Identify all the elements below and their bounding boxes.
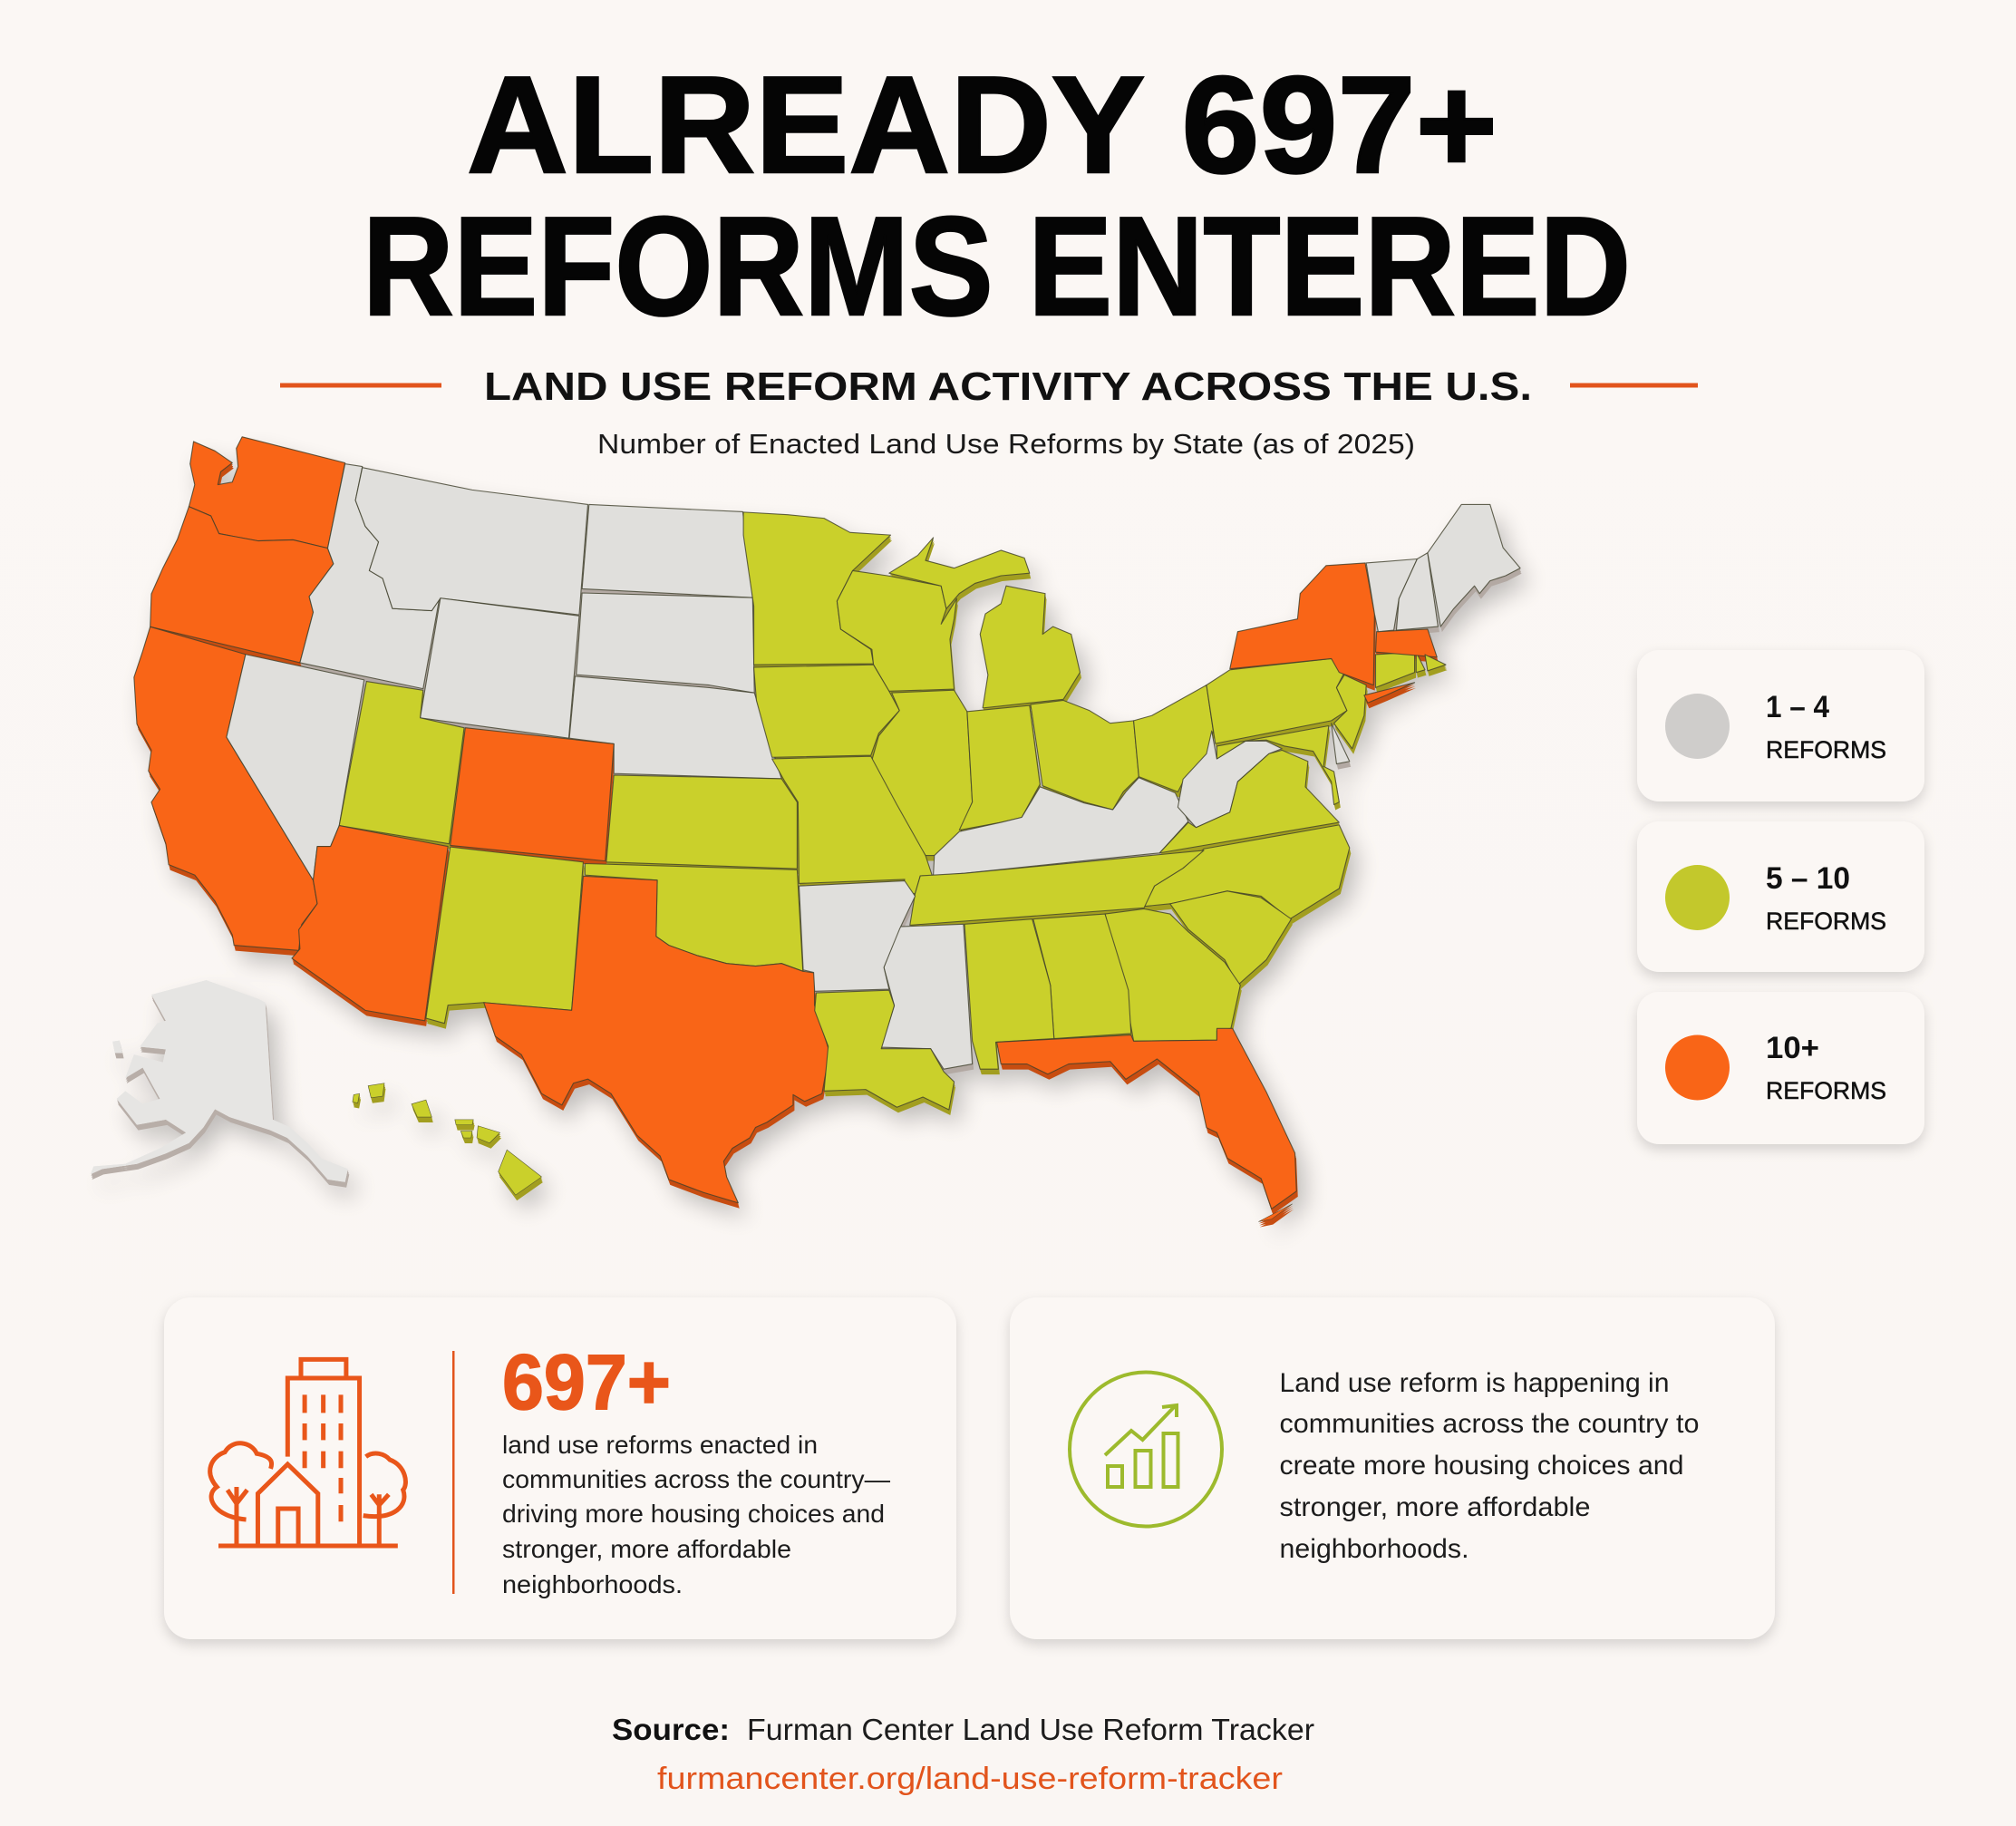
state: North Carolina bbox=[1144, 825, 1350, 919]
state: Kentucky bbox=[934, 778, 1188, 876]
legend card: 1-4 reforms: 1 – 4 bbox=[1766, 690, 1829, 724]
stat description: communities across the country— bbox=[502, 1465, 891, 1493]
legend card: 1-4 reforms bbox=[1637, 650, 1924, 801]
state: Maryland bbox=[1216, 725, 1339, 804]
state: Rhode Island bbox=[1416, 652, 1425, 673]
statement text: stronger, more affordable bbox=[1280, 1492, 1590, 1522]
stat description: land use reforms enacted in bbox=[502, 1431, 818, 1459]
source bbox=[612, 1713, 1314, 1796]
source: Source: bbox=[612, 1713, 730, 1746]
state: Montana bbox=[355, 468, 588, 615]
state: Missouri bbox=[772, 756, 932, 894]
state: New York bbox=[1230, 563, 1374, 685]
state: Florida Keys bbox=[1258, 1204, 1293, 1221]
map caption: Number of Enacted Land Use Reforms by State (as of 2025) bbox=[597, 428, 1415, 460]
state: Massachusetts bbox=[1376, 629, 1437, 657]
state: Illinois bbox=[871, 690, 973, 856]
legend card: 5-10 reforms bbox=[1637, 821, 1924, 972]
state: Alabama bbox=[1033, 914, 1131, 1039]
title bbox=[363, 48, 1631, 345]
legend card: 10+ reforms: REFORMS bbox=[1766, 1077, 1886, 1104]
statement text: Land use reform is happening in bbox=[1280, 1368, 1670, 1398]
state: Kansas bbox=[606, 775, 797, 869]
state: Virginia bbox=[1159, 750, 1339, 853]
state: Florida bbox=[997, 1028, 1296, 1209]
state: Texas bbox=[484, 876, 829, 1203]
panel: 697+ reforms bbox=[164, 1297, 956, 1639]
state: Wyoming bbox=[421, 598, 579, 738]
state: Oregon bbox=[150, 507, 334, 663]
state: Iowa bbox=[754, 665, 899, 757]
state: Alaska bbox=[91, 980, 348, 1182]
state: Maine bbox=[1428, 504, 1520, 626]
state: Nevada bbox=[227, 655, 364, 880]
legend card: 10+ reforms bbox=[1637, 992, 1924, 1144]
state: Louisiana bbox=[815, 990, 955, 1110]
state: Colorado bbox=[451, 728, 614, 861]
western states bbox=[91, 437, 829, 1203]
state: Long Island bbox=[1364, 683, 1415, 703]
state: Wisconsin bbox=[837, 570, 956, 691]
state: Cape Cod bbox=[1425, 655, 1446, 671]
state: Indiana bbox=[959, 705, 1040, 830]
state: Michigan upper peninsula bbox=[889, 538, 1030, 608]
title: ALREADY 697+ bbox=[467, 48, 1497, 202]
stat description: neighborhoods. bbox=[502, 1570, 683, 1598]
subheading with rules: LAND USE REFORM ACTIVITY ACROSS THE U.S. bbox=[484, 364, 1532, 409]
legend card: 1-4 reforms: REFORMS bbox=[1766, 736, 1886, 763]
source: Furman Center Land Use Reform Tracker bbox=[747, 1713, 1314, 1746]
state: Utah bbox=[339, 682, 464, 844]
state: Michigan lower peninsula bbox=[980, 586, 1080, 708]
stat description: driving more housing choices and bbox=[502, 1500, 885, 1528]
state: West Virginia bbox=[1178, 731, 1282, 828]
state: North Dakota bbox=[582, 504, 752, 597]
state: eastern Ohio region bbox=[1134, 685, 1213, 792]
subheading with rules bbox=[280, 364, 1698, 409]
map: US states by number of enacted reforms bbox=[91, 437, 1520, 1221]
stat description bbox=[502, 1431, 891, 1598]
state: Alabama west section bbox=[964, 919, 1054, 1069]
state: New Hampshire bbox=[1396, 553, 1438, 630]
icon: rising bar chart in circle bbox=[1070, 1373, 1222, 1527]
state: Idaho bbox=[300, 464, 440, 689]
state: Hawaii bbox=[353, 1083, 541, 1195]
state: Connecticut bbox=[1376, 652, 1415, 687]
state: California bbox=[134, 626, 317, 950]
state: Vermont bbox=[1366, 558, 1417, 632]
legend card: 5-10 reforms: 5 – 10 bbox=[1766, 861, 1850, 896]
state: Arkansas bbox=[800, 881, 916, 991]
state: Ohio bbox=[1031, 700, 1139, 810]
state: South Dakota bbox=[577, 593, 754, 693]
source: furmancenter.org/land-use-reform-tracker bbox=[657, 1762, 1283, 1796]
icon: buildings, house and trees bbox=[210, 1359, 405, 1546]
state: Mississippi bbox=[881, 924, 973, 1069]
stat description: stronger, more affordable bbox=[502, 1535, 791, 1563]
legend card: 10+ reforms: 10+ bbox=[1766, 1031, 1819, 1065]
statement text: neighborhoods. bbox=[1280, 1534, 1468, 1564]
state: Nebraska bbox=[569, 676, 781, 779]
statement text bbox=[1280, 1368, 1699, 1564]
state: Pennsylvania bbox=[1207, 658, 1347, 743]
state: New Mexico bbox=[426, 847, 583, 1024]
divider bbox=[452, 1351, 455, 1594]
state: Delaware bbox=[1332, 724, 1350, 764]
eastern states bbox=[743, 504, 1520, 1221]
state: New Jersey bbox=[1334, 675, 1366, 749]
panel: land use reform statement bbox=[1010, 1297, 1775, 1639]
legend card: 5-10 reforms: REFORMS bbox=[1766, 908, 1886, 935]
statement text: create more housing choices and bbox=[1280, 1451, 1684, 1481]
state: Tennessee bbox=[910, 850, 1204, 925]
state: Arizona bbox=[292, 826, 448, 1021]
state: Washington bbox=[189, 437, 345, 549]
map: extruded base and shadow bbox=[91, 437, 1520, 1221]
statement text: communities across the country to bbox=[1280, 1409, 1699, 1439]
state: South Carolina bbox=[1170, 891, 1292, 986]
stat number: 697+ bbox=[502, 1339, 671, 1426]
title: REFORMS ENTERED bbox=[363, 188, 1631, 345]
state: Oklahoma bbox=[585, 863, 803, 971]
legend bbox=[1637, 650, 1924, 1144]
state: Minnesota bbox=[743, 512, 891, 665]
state: Georgia bbox=[1105, 908, 1240, 1041]
